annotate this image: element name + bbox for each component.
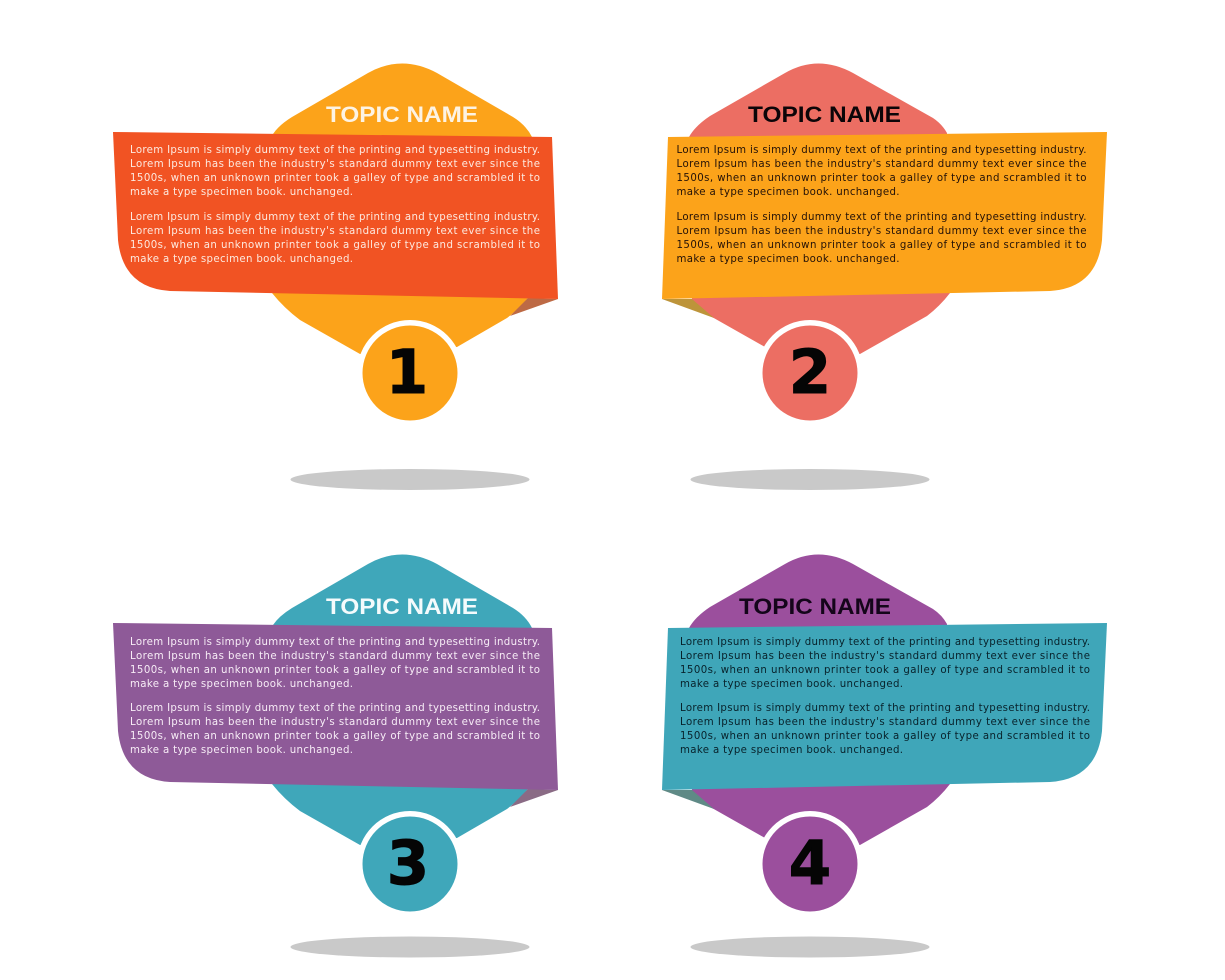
body text 3: 1500s, when an unknown printer took a galley of type and scrambled it to (130, 665, 540, 676)
banner 4 (662, 623, 1107, 790)
banner 1 (113, 132, 558, 299)
number 4: 4 (789, 828, 831, 899)
hexagon backdrop 3 (272, 554, 532, 845)
body text 3: Lorem Ipsum is simply dummy text of the printing and typesetting industry. (130, 637, 540, 648)
body text 2: make a type specimen book. unchanged. (676, 187, 900, 198)
body text 3: make a type specimen book. unchanged. (130, 679, 353, 690)
number 2: 2 (789, 337, 831, 408)
body text 4: 1500s, when an unknown printer took a galley of type and scrambled it to (680, 665, 1090, 676)
body text 3: Lorem Ipsum has been the industry's standard dummy text ever since the (130, 717, 540, 728)
body text 2: Lorem Ipsum is simply dummy text of the printing and typesetting industry. (676, 212, 1086, 223)
shadow 2 (690, 469, 930, 490)
hexagon backdrop 1 (272, 64, 532, 354)
number badge 3 (362, 816, 458, 912)
number 3: 3 (387, 828, 429, 899)
body text 1: make a type specimen book. unchanged. (130, 187, 353, 198)
panel: topic 4 (662, 554, 1107, 958)
body text 4 (680, 637, 1090, 756)
number badge 1 (362, 326, 458, 420)
body text 2: 1500s, when an unknown printer took a galley of type and scrambled it to (676, 173, 1086, 184)
title 4: TOPIC NAME (739, 594, 891, 619)
white ring 1 (357, 320, 463, 426)
shadow 3 (290, 936, 530, 958)
number badge 2 (762, 326, 858, 420)
body text 2: 1500s, when an unknown printer took a galley of type and scrambled it to (676, 240, 1086, 251)
hexagon backdrop 4 (689, 554, 950, 845)
banner 3 (113, 623, 558, 790)
fold 3 (510, 789, 558, 807)
body text 3: make a type specimen book. unchanged. (130, 745, 353, 756)
body text 1: 1500s, when an unknown printer took a galley of type and scrambled it to (130, 173, 540, 184)
body text 4: Lorem Ipsum is simply dummy text of the printing and typesetting industry. (680, 703, 1090, 714)
body text 4: 1500s, when an unknown printer took a galley of type and scrambled it to (680, 731, 1090, 742)
body text 4: Lorem Ipsum has been the industry's standard dummy text ever since the (680, 651, 1090, 662)
white ring 3 (357, 811, 463, 917)
body text 2: Lorem Ipsum has been the industry's standard dummy text ever since the (676, 226, 1086, 237)
body text 2: Lorem Ipsum has been the industry's standard dummy text ever since the (676, 159, 1086, 170)
body text 3 (130, 637, 540, 756)
shadow 4 (690, 936, 930, 958)
body text 4: Lorem Ipsum is simply dummy text of the printing and typesetting industry. (680, 637, 1090, 648)
body text 4: make a type specimen book. unchanged. (680, 679, 903, 690)
body text 4: Lorem Ipsum has been the industry's standard dummy text ever since the (680, 717, 1090, 728)
white ring 4 (757, 811, 863, 917)
body text 4: make a type specimen book. unchanged. (680, 745, 903, 756)
title 2: TOPIC NAME (748, 102, 901, 127)
number badge 4 (762, 816, 858, 912)
body text 2: Lorem Ipsum is simply dummy text of the printing and typesetting industry. (676, 145, 1086, 156)
title 3: TOPIC NAME (326, 594, 478, 619)
body text 1: 1500s, when an unknown printer took a galley of type and scrambled it to (130, 240, 540, 251)
body text 1: Lorem Ipsum has been the industry's standard dummy text ever since the (130, 226, 540, 237)
panel: topic 1 (113, 64, 558, 490)
title 1: TOPIC NAME (326, 102, 478, 127)
body text 3: Lorem Ipsum is simply dummy text of the printing and typesetting industry. (130, 703, 540, 714)
body text 1 (130, 145, 540, 265)
banner 2 (662, 132, 1107, 299)
body text 1: Lorem Ipsum has been the industry's standard dummy text ever since the (130, 159, 540, 170)
number 1: 1 (386, 337, 428, 408)
body text 3: Lorem Ipsum has been the industry's standard dummy text ever since the (130, 651, 540, 662)
shadow 1 (290, 469, 530, 490)
body text 1: make a type specimen book. unchanged. (130, 254, 353, 265)
hexagon backdrop 2 (689, 64, 950, 354)
fold 4 (662, 790, 714, 809)
body text 3: 1500s, when an unknown printer took a galley of type and scrambled it to (130, 731, 540, 742)
body text 2: make a type specimen book. unchanged. (676, 254, 900, 265)
panel: topic 2 (662, 64, 1107, 490)
body text 1: Lorem Ipsum is simply dummy text of the printing and typesetting industry. (130, 212, 540, 223)
body text 2 (676, 145, 1086, 265)
panel: topic 3 (113, 554, 558, 958)
white ring 2 (757, 320, 863, 426)
fold 2 (662, 299, 714, 318)
fold 1 (510, 298, 558, 316)
body text 1: Lorem Ipsum is simply dummy text of the printing and typesetting industry. (130, 145, 540, 156)
